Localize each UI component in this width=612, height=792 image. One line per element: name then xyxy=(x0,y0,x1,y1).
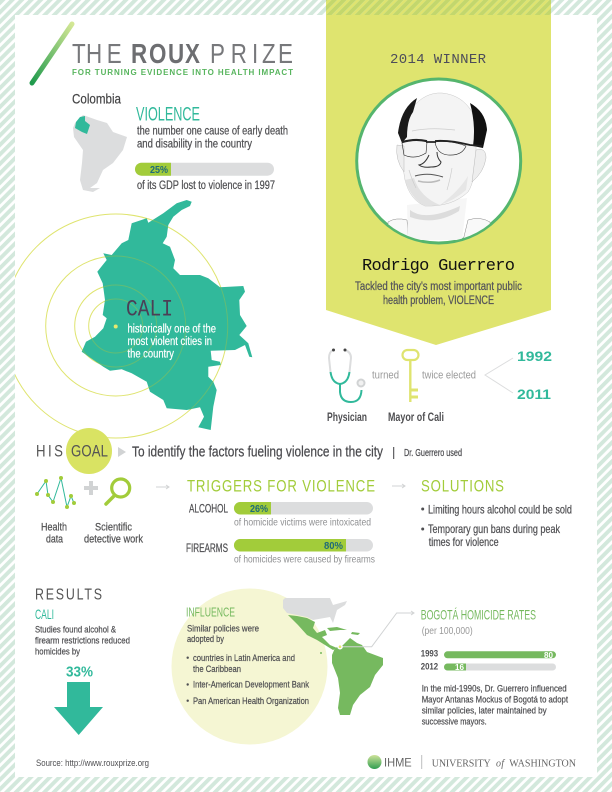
logo title: THE xyxy=(72,39,122,70)
winner name: Rodrigo Guerrero xyxy=(362,257,515,276)
Bogotá description xyxy=(422,684,568,728)
bar 2012: 16 xyxy=(455,662,464,672)
hair xyxy=(398,98,417,143)
results heading: RESULTS xyxy=(35,585,102,603)
Cali description xyxy=(128,324,216,360)
his goal heading xyxy=(36,442,108,461)
bar 2012: 2012 xyxy=(421,661,438,672)
winner description: Tackled the city's most important public xyxy=(355,281,522,293)
logo title: PRIZE xyxy=(210,39,293,70)
Bogotá panel xyxy=(421,606,568,728)
University of Washington wordmark: of xyxy=(496,759,505,770)
goal highlight circle xyxy=(66,428,112,474)
portrait xyxy=(357,79,521,245)
influence circle xyxy=(172,588,328,744)
arrow: goal xyxy=(118,447,126,457)
bar 1993: 80 xyxy=(544,650,553,660)
influence list: the Caribbean xyxy=(193,664,241,675)
GDP caption: of its GDP lost to violence in 1997 xyxy=(137,180,275,192)
influence list: countries in Latin America and xyxy=(193,653,295,664)
logo slash xyxy=(32,24,72,83)
violence heading: VIOLENCE xyxy=(136,105,200,126)
label: detective work xyxy=(84,522,143,546)
results text xyxy=(35,625,130,658)
glasses xyxy=(402,140,482,157)
icon: IHME xyxy=(368,755,382,769)
GDP bar xyxy=(135,163,274,176)
influence list: Pan American Health Organization xyxy=(193,696,309,707)
Cali subheading: CALI xyxy=(35,606,54,622)
violence description: the number one cause of early death xyxy=(137,126,288,138)
Cali description: historically one of the xyxy=(128,324,216,336)
violence description xyxy=(137,126,288,151)
triggers heading: TRIGGERS FOR VIOLENCE xyxy=(187,477,375,496)
solutions heading: SOLUTIONS xyxy=(421,477,504,496)
University of Washington wordmark: WASHINGTON xyxy=(509,759,576,770)
label: health data: Health xyxy=(41,522,67,534)
goal text: To identify the factors fueling violence in the city xyxy=(132,444,384,460)
Cali label xyxy=(126,297,216,360)
solution two: Temporary gun bans during peak xyxy=(428,522,561,536)
title logo xyxy=(32,24,293,83)
striped border over winner panel xyxy=(326,0,551,15)
icon: magnifier xyxy=(106,479,130,504)
firearms caption: of homicides were caused by firearms xyxy=(234,554,375,566)
firearms label: FIREARMS xyxy=(186,543,228,555)
label: turned: turned xyxy=(372,370,399,382)
firearms bar xyxy=(234,539,373,552)
label: health data xyxy=(41,522,67,546)
winner heading: 2014 WINNER xyxy=(390,52,487,68)
year 1992: 1992 xyxy=(517,349,552,364)
results text: firearm restrictions reduced xyxy=(35,636,130,646)
influence intro: adopted by xyxy=(187,634,224,645)
label: Physician: Physician xyxy=(327,412,367,424)
arrow to solutions xyxy=(392,484,405,488)
his goal heading: HIS xyxy=(36,442,63,461)
Cali description: the country xyxy=(128,348,174,360)
influence list: Inter-American Development Bank xyxy=(193,680,309,691)
target rings xyxy=(4,214,228,438)
label: detective work: detective work xyxy=(84,534,143,546)
Cali marker xyxy=(114,324,118,328)
violence description: and disability in the country xyxy=(137,139,252,151)
branch lines xyxy=(485,358,513,393)
firearms bar: 80% xyxy=(324,541,343,552)
winner description: health problem, VIOLENCE xyxy=(383,295,494,307)
solution two xyxy=(421,522,561,549)
mini map: South America xyxy=(73,115,127,192)
University of Washington wordmark: UNIVERSITY xyxy=(432,759,491,770)
logo title xyxy=(72,39,293,70)
icon: key xyxy=(402,350,418,402)
IHME wordmark: IHME xyxy=(384,756,412,770)
alcohol label: ALCOHOL xyxy=(189,504,228,516)
triggers panel xyxy=(186,477,375,566)
face and shoulders xyxy=(388,218,490,238)
Colombia heading: Colombia xyxy=(72,90,121,106)
Bogotá description: In the mid-1990s, Dr. Guerrero influenced xyxy=(422,684,567,695)
source: Source: http://www.rouxprize.org xyxy=(36,758,149,768)
target rings over map xyxy=(82,218,228,410)
year 2011: 2011 xyxy=(517,387,552,402)
influence intro xyxy=(187,624,259,645)
label: Mayor of Cali: Mayor of Cali xyxy=(388,412,444,424)
results text: Studies found alcohol & xyxy=(35,625,117,636)
map of Colombia xyxy=(82,200,252,430)
Bogotá description: similar policies, later maintained by xyxy=(422,705,547,716)
label: health data: data xyxy=(46,534,64,546)
nose and mouth xyxy=(419,152,441,167)
influence panel xyxy=(172,588,383,744)
influence heading: INFLUENCE xyxy=(186,605,235,620)
career path xyxy=(327,348,552,424)
bar 2012 xyxy=(421,661,556,672)
logo title: ROUX xyxy=(131,39,200,70)
label: detective work: Scientific xyxy=(95,522,132,534)
winner description xyxy=(355,281,522,307)
footer logos xyxy=(368,755,576,770)
Bogotá description: successive mayors. xyxy=(422,717,487,728)
label: twice elected: twice elected xyxy=(422,370,476,382)
stat: 33%: 33% xyxy=(66,664,93,681)
goal text: | xyxy=(392,444,395,460)
solution two: times for violence xyxy=(429,535,499,549)
his goal heading: GOAL xyxy=(71,442,108,461)
violence block xyxy=(135,105,288,192)
results text: homicides by xyxy=(35,647,80,658)
icon: stethoscope xyxy=(329,348,364,402)
map of the Americas xyxy=(283,598,383,715)
influence list xyxy=(186,653,309,707)
arrow: down xyxy=(54,682,103,735)
logo tagline: FOR TURNING EVIDENCE INTO HEALTH IMPACT xyxy=(72,68,293,77)
Cali label: CALI xyxy=(126,297,173,323)
results panel xyxy=(35,585,130,735)
icon: plus xyxy=(84,481,98,495)
bar 1993: 1993 xyxy=(421,649,438,660)
Bogotá description: Mayor Antanas Mockus of Bogotá to adopt xyxy=(422,695,568,706)
Bogotá heading: BOGOTÁ HOMICIDE RATES xyxy=(421,606,536,622)
bar 1993 xyxy=(421,649,556,660)
Bogotá unit: (per 100,000) xyxy=(422,626,473,637)
GDP bar: 25% xyxy=(150,165,168,176)
Cali description: most violent cities in xyxy=(128,336,212,348)
alcohol bar xyxy=(234,502,373,515)
alcohol caption: of homicide victims were intoxicated xyxy=(234,517,371,529)
goal text: Dr. Guerrero used xyxy=(404,448,462,459)
solutions panel xyxy=(421,477,572,549)
alcohol bar: 26% xyxy=(250,504,268,515)
winner panel xyxy=(326,0,551,345)
icon: health data xyxy=(35,476,76,509)
University of Washington wordmark xyxy=(432,759,576,770)
connector: Bogotá to rates xyxy=(337,611,414,650)
influence intro: Similar policies were xyxy=(187,624,259,635)
arrow to triggers xyxy=(156,485,169,489)
